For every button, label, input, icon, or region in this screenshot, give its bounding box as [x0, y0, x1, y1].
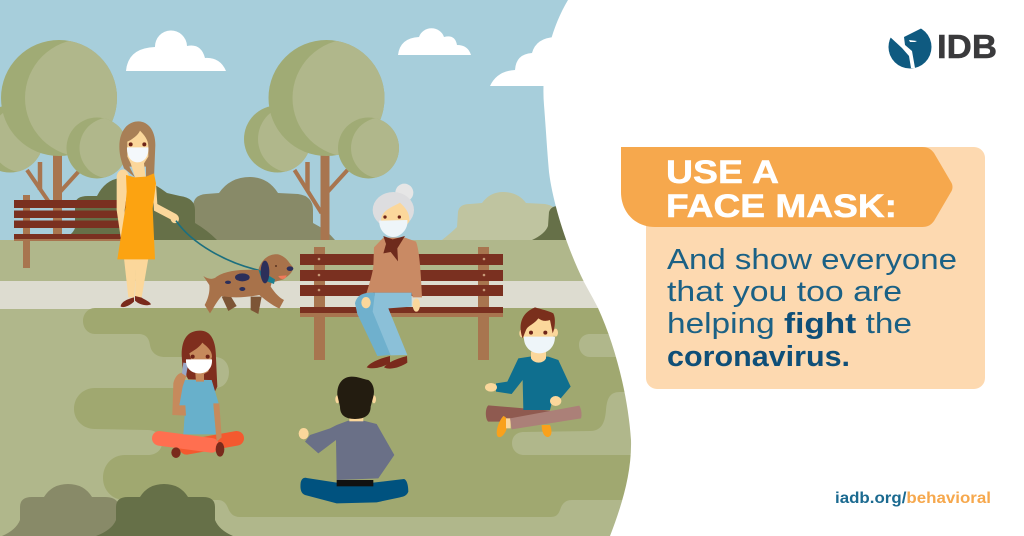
seated girl with phone: [159, 331, 237, 458]
boy shirt: [496, 357, 571, 410]
boy back leg: [486, 405, 550, 422]
man belt: [337, 480, 373, 486]
boy ankle: [506, 418, 511, 428]
back grass: [0, 240, 640, 536]
body text: that you too are: [667, 276, 902, 308]
boy eyes and mask: [524, 331, 555, 353]
white right side background: [543, 0, 1024, 536]
message panel: [621, 147, 985, 389]
back bushes: [60, 177, 575, 240]
cloud middle: [398, 28, 471, 55]
girl arms: [172, 373, 222, 442]
IDB logo: [888, 24, 997, 68]
man ears and neck: [335, 395, 376, 421]
body text: And show everyone: [667, 244, 957, 276]
logo wordmark: IDB: [937, 28, 997, 65]
cloud left: [126, 31, 226, 71]
woman legs and shoes: [121, 258, 151, 307]
body text: coronavirus.: [667, 341, 850, 373]
girl legs: [159, 438, 237, 447]
woman eyes and mask: [127, 142, 148, 162]
grandmother scarf: [383, 236, 405, 261]
body text: [667, 244, 957, 373]
cloud right: [490, 37, 575, 86]
boy hair: [521, 307, 555, 338]
man shirt: [305, 421, 394, 480]
grandmother shoes: [367, 356, 407, 369]
woman arms: [117, 170, 179, 237]
man hand: [299, 428, 309, 439]
heading: USE A: [666, 154, 779, 190]
girl hair: [182, 331, 217, 395]
footpath: [0, 281, 640, 309]
bench centre: [300, 247, 503, 360]
woman dress: [117, 173, 156, 259]
orange heading banner: [621, 147, 952, 227]
tree left: [0, 40, 122, 234]
body text: helping fight the: [667, 308, 912, 340]
girl face and mask: [186, 343, 212, 382]
peach body box: [646, 147, 985, 389]
seated man seen from behind: [299, 377, 408, 503]
website link: iadb.org/ behavioral: [835, 490, 991, 507]
grandmother top: [366, 238, 422, 297]
boy neck and head: [519, 315, 558, 363]
leash: [176, 221, 261, 271]
front lawn: [74, 308, 640, 517]
grandmother hands: [361, 297, 420, 312]
girl phone: [182, 363, 188, 376]
boy hands: [485, 383, 561, 406]
tree right: [244, 39, 412, 240]
grandmother face and mask: [379, 203, 409, 237]
man hair: [337, 377, 374, 419]
girl feet: [171, 442, 224, 458]
boy feet: [497, 416, 551, 437]
bench left: [14, 195, 128, 268]
woman neck and face: [127, 131, 148, 177]
heading: FACE MASK:: [666, 188, 897, 224]
girl shirt: [179, 380, 219, 434]
dog: [203, 254, 293, 314]
heading: [666, 154, 897, 224]
boy front leg: [510, 406, 582, 429]
logo globe: [888, 24, 932, 68]
woman walking dog: [117, 121, 293, 314]
grandmother hair: [373, 184, 414, 228]
grandmother jeans: [355, 293, 412, 356]
bottom bushes: [2, 484, 233, 536]
seated boy: [485, 307, 582, 437]
woman hair: [119, 121, 155, 178]
man trousers: [300, 478, 408, 503]
grandmother on bench: [355, 184, 422, 369]
sky background: [0, 0, 640, 241]
